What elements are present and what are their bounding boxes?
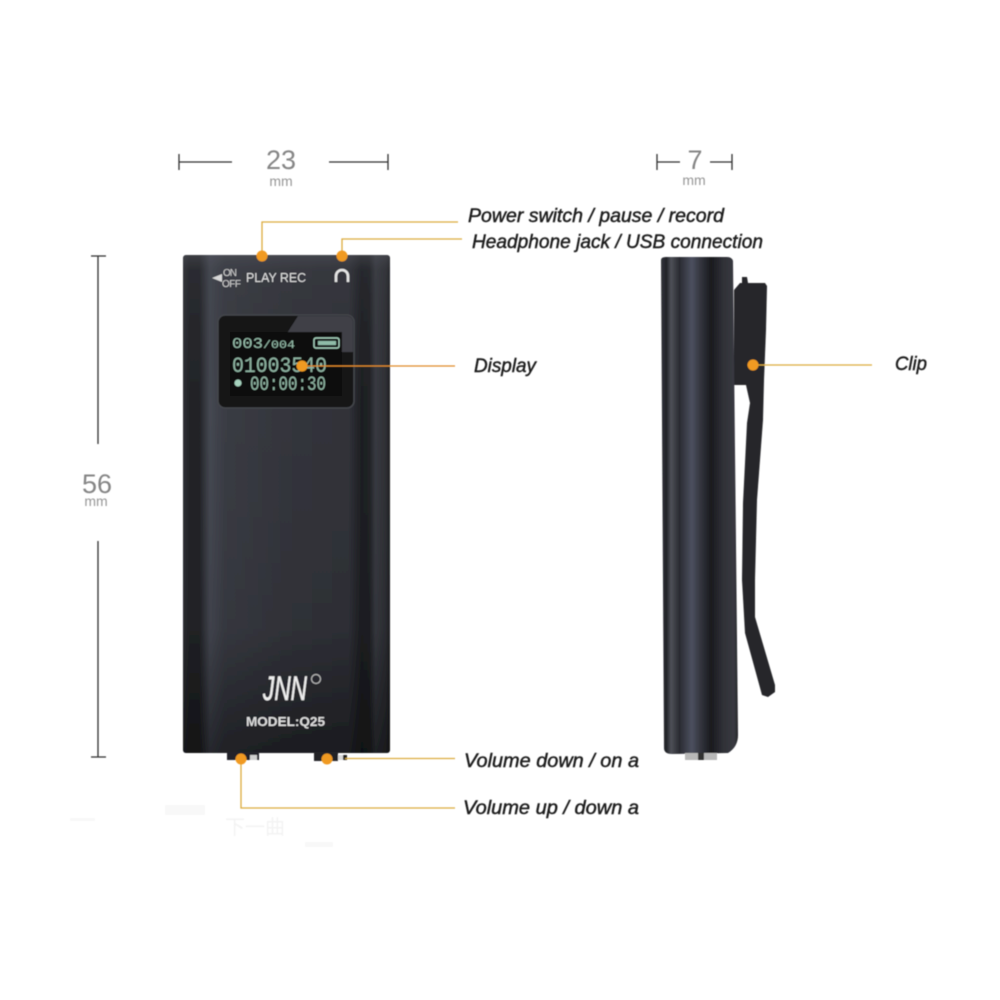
- top labels: ON: [223, 268, 237, 279]
- dimension: width 23 mm: [179, 145, 388, 189]
- device: front view: [183, 255, 390, 761]
- display: [218, 315, 354, 408]
- top labels: [212, 268, 306, 290]
- label: headphone jack: Headphone jack / USB connection: [472, 232, 763, 253]
- icon: headphones: [336, 270, 348, 282]
- device: side view: [661, 257, 775, 760]
- dimension: thickness 7 mm: 7: [687, 145, 703, 175]
- brand logo: MODEL:Q25: [246, 714, 325, 729]
- dimension: height 56 mm: mm: [84, 493, 108, 509]
- brand logo: [246, 670, 325, 729]
- dimension: height 56 mm: [82, 256, 112, 757]
- dimension: height 56 mm: 56: [82, 469, 112, 499]
- body: [661, 257, 738, 754]
- callout dots: [236, 250, 758, 764]
- jack: [685, 753, 717, 760]
- dimension: width 23 mm: mm: [269, 173, 293, 189]
- faint background residue: [70, 805, 333, 847]
- display: 003: [232, 336, 263, 353]
- label: clip: Clip: [895, 354, 927, 375]
- clip: [734, 277, 775, 697]
- display: 01003540: [232, 354, 327, 379]
- bottom buttons: [227, 752, 347, 761]
- label: volume up: Volume up / down a: [463, 798, 639, 819]
- dimension: thickness 7 mm: [657, 145, 732, 188]
- top labels: PLAY REC: [246, 270, 306, 285]
- display: /004: [263, 340, 295, 352]
- display: 00:00:30: [250, 374, 326, 397]
- dimension: thickness 7 mm: mm: [682, 172, 706, 188]
- brand logo: JNN: [262, 670, 307, 708]
- top labels: OFF: [222, 279, 241, 290]
- dimension: width 23 mm: 23: [266, 145, 296, 175]
- faint background residue: 下一曲: [225, 816, 285, 839]
- label: volume down: Volume down / on a: [464, 751, 639, 772]
- callout lines: [241, 222, 872, 808]
- device body: [183, 255, 390, 753]
- label: display: Display: [474, 356, 537, 377]
- label: power switch: Power switch / pause / record: [468, 206, 725, 227]
